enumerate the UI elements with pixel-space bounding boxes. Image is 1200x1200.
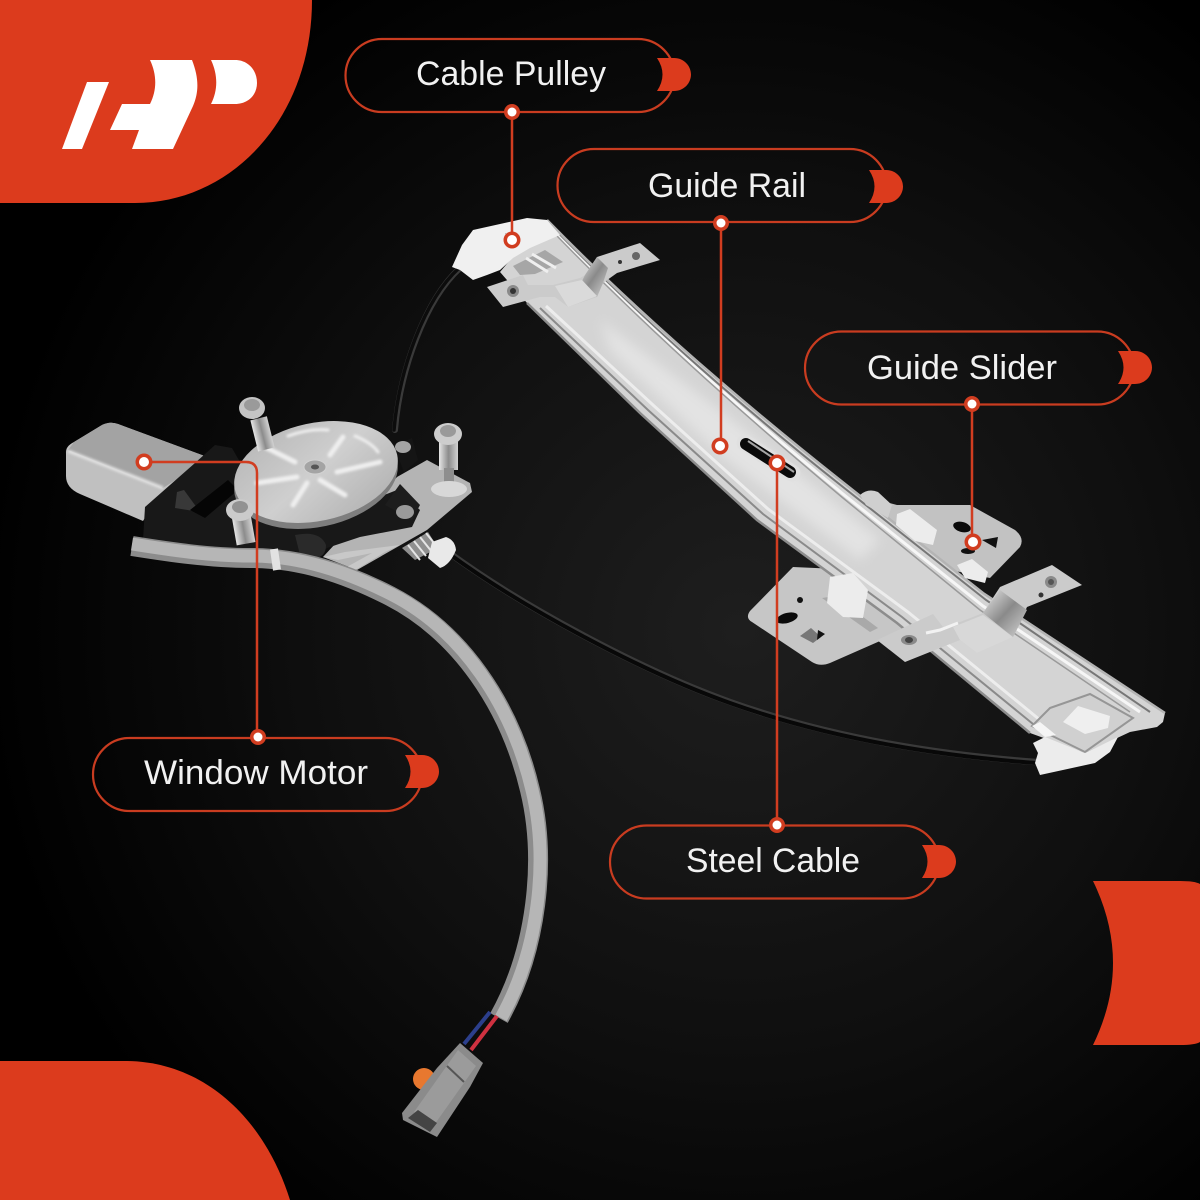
corner shape: right edge	[1093, 881, 1200, 1045]
harness wires	[464, 1012, 497, 1050]
corner shape: bottom left	[0, 1061, 290, 1200]
leader: Steel Cable	[768, 454, 786, 833]
label: Window Motor: Window Motor	[144, 754, 368, 792]
wiring harness	[132, 544, 540, 1018]
leader: Guide Rail	[712, 215, 729, 454]
label: Guide Rail: Guide Rail	[648, 167, 806, 205]
label: Guide Rail	[558, 149, 903, 222]
steel cable upper run	[394, 268, 460, 430]
logo mark	[62, 60, 257, 149]
gear cover disk	[225, 407, 407, 543]
guide rail	[500, 220, 1165, 753]
label: Cable Pulley	[346, 39, 691, 112]
label: Steel Cable	[610, 826, 956, 898]
upper bracket	[487, 243, 660, 307]
leader: Guide Slider	[964, 396, 982, 550]
bolt rear left	[239, 397, 275, 451]
label: Guide Slider: Guide Slider	[867, 349, 1057, 387]
lower bracket	[877, 565, 1082, 662]
window motor housing	[66, 423, 210, 521]
slider plate lower left	[748, 567, 905, 665]
guide slider blocks	[822, 491, 988, 632]
label: Steel Cable: Steel Cable	[686, 842, 860, 880]
label: Window Motor	[93, 738, 439, 811]
label: Cable Pulley: Cable Pulley	[416, 55, 606, 93]
right mounting plate	[323, 460, 472, 570]
connector	[402, 1043, 483, 1137]
corner shape: top left with logo	[0, 0, 312, 203]
rail slot	[745, 441, 794, 473]
bolt rear right	[431, 423, 467, 497]
cable spring and ferrule	[323, 532, 456, 572]
top pulley	[452, 218, 563, 280]
slider plate upper right	[860, 495, 1022, 578]
leader: Window Motor	[136, 454, 266, 745]
label: Guide Slider	[805, 332, 1152, 404]
leader: Cable Pulley	[504, 104, 520, 248]
bolt front	[226, 499, 255, 545]
product: window regulator	[66, 218, 1165, 1137]
black gearbox	[143, 438, 420, 558]
bottom pulley	[1032, 694, 1133, 775]
steel cable lower run	[448, 552, 1036, 763]
